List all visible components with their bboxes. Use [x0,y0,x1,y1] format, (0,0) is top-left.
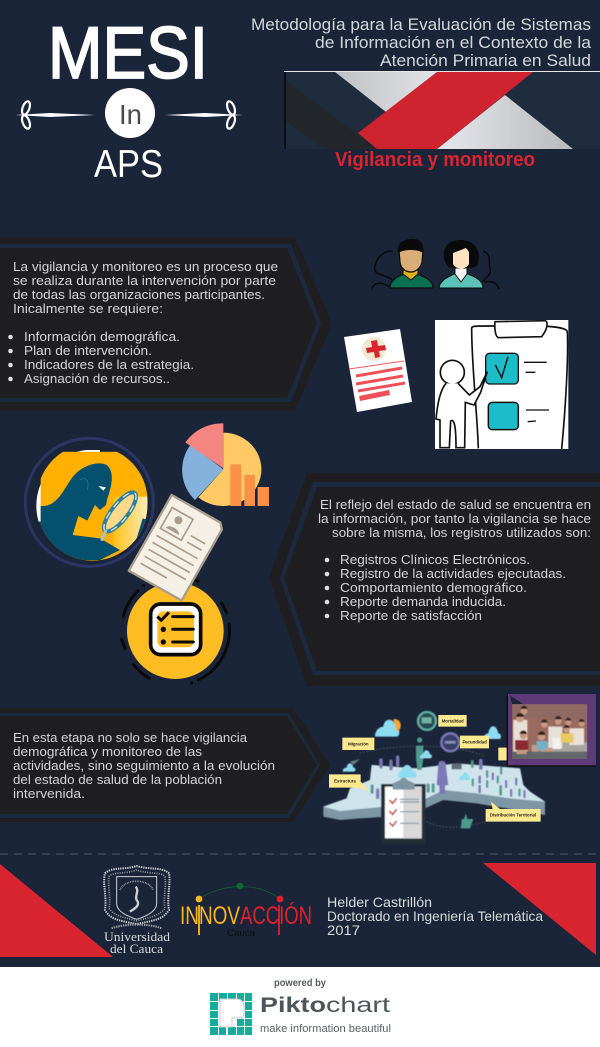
panel text: intro: Inicalmente se requiere: [13,301,163,316]
panel text: etapa [13,730,275,801]
title word MESI: MESI [48,13,208,94]
icons: clouds [343,720,501,780]
header subtitle: Metodología para la Evaluación de Sistemas [251,15,591,34]
panel text: etapa: actividades, sino seguimiento a la evolución [13,758,275,773]
panel text: intro [13,259,278,316]
panel list: requisitos: Información demográfica. [24,329,180,344]
icon: presenter at clipboard checklist [435,320,568,449]
header subtitle: de Información en el Contexto de la [315,33,592,52]
panel list: requisitos: Plan de intervención. [24,343,152,358]
panel: proceso de vigilancia [0,237,332,411]
icon: checked box [486,353,518,384]
logo: Universidad del Cauca [104,866,171,956]
panel text: etapa: del estado de salud de la población [13,772,222,787]
label cards: Mortalidad [442,718,464,723]
banner image: geometric red and white bands [284,71,600,149]
logo: Innovacción Cauca [180,883,312,938]
panel list: registros: Reporte demanda inducida. [340,594,506,609]
header subtitle [251,15,592,70]
panel list: requisitos: Indicadores de la estrategia. [24,357,194,372]
header subtitle: Atención Primaria en Salud [380,51,591,70]
author credits: Doctorado en Ingeniería Telemática [327,908,543,924]
icon: empty box [488,402,518,430]
icon: medical document [344,329,412,412]
label cards: Migración [348,742,369,747]
author credits: 2017 [327,922,360,938]
footer: powered by Piktochart: chart [326,994,390,1017]
panel list: registros: Comportamiento demográfico. [340,580,527,595]
logo: Universidad del Cauca: Universidad [104,930,171,944]
circle badge: In [105,88,155,138]
icon: personal record document [129,495,224,601]
circle badge: In: In [119,99,142,130]
crest [104,866,170,928]
panel text: reflejo del estado de salud: la información, por tanto la vigilancia se hace [318,511,591,526]
label cards: Estructura [334,779,356,784]
icon: two professionals [372,239,499,289]
panel list: registros: Reporte de satisfacción [340,608,482,623]
footer: powered by Piktochart: make information beautiful [260,1023,391,1035]
panel list: registros: Registros Clínicos Electrónicos. [340,552,530,567]
panel text: etapa: intervenida. [13,786,85,801]
panel text: intro: de todas las organizaciones participantes. [13,287,265,302]
panel text: intro: La vigilancia y monitoreo es un proceso que [13,259,278,274]
panel list: requisitos [8,329,194,386]
panel text: intro: se realiza durante la intervención por parte [13,273,276,288]
panel list: requisitos: Asignación de recursos.. [24,371,170,386]
right ornament arrow [165,100,243,130]
panel text: reflejo del estado de salud: El reflejo del estado de salud se encuentra en [320,497,591,512]
label cards: Distribución Territorial [490,813,536,818]
footer: powered by Piktochart: Pikto [260,994,326,1017]
panel text: etapa: demográfica y monitoreo de las [13,744,203,759]
title: MESI In APS [15,13,243,186]
footer shape: right red triangle [483,863,596,955]
label cards: Fecundidad [463,740,487,745]
icon: detective with magnifying glass [25,438,153,566]
panel text: reflejo del estado de salud: sobre la misma, los registros utilizados son: [332,525,591,540]
logo: Innovacción Cauca: ACCIÓN [240,901,312,930]
logo: Innovacción Cauca: Cauca [227,928,255,938]
footer: powered by Piktochart [0,967,600,1047]
icon: Piktochart mark [210,993,252,1035]
clipboard [381,778,426,844]
panel list: registros: Registro de la actividades ejecutadas. [340,566,566,581]
label cards [329,715,541,822]
logo: Universidad del Cauca: del Cauca [110,942,163,956]
logo: Innovacción Cauca: INNOV [180,902,240,930]
panel list: registros [325,552,566,623]
author credits: Helder Castrillón [327,894,432,910]
icons: people markers [376,756,526,799]
panel: seguimiento de la población [0,708,330,822]
section heading: Vigilancia y monitoreo: Vigilancia y monitoreo [335,149,535,171]
left ornament arrow [15,100,95,130]
photo: children in purple frame [507,694,596,766]
panel text: etapa: En esta etapa no solo se hace vigilancia [13,730,248,745]
author credits [327,894,543,938]
footer: powered by Piktochart: powered by [274,977,326,989]
illustration: population map with labels [323,712,545,844]
icon: checklist circle [122,580,229,683]
panel text: reflejo del estado de salud [318,497,591,540]
icon: pie and bar chart [182,423,269,506]
title word APS: APS [94,143,163,186]
footer shape: left red triangle [0,864,113,957]
panel: registros utilizados [269,473,600,686]
